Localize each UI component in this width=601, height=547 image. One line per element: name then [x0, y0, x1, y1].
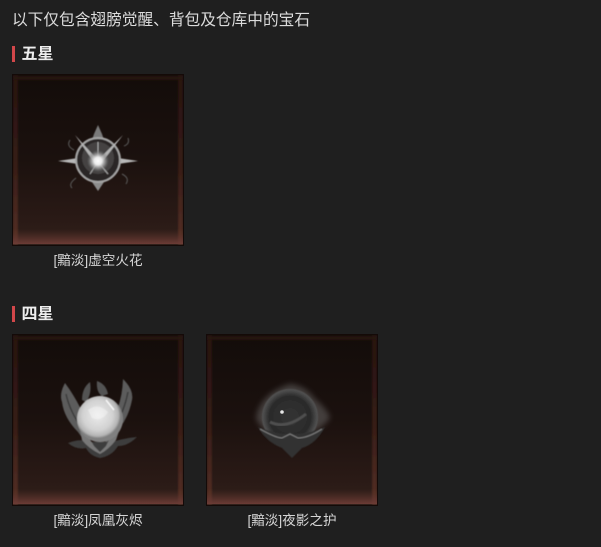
gem card: night shadow guard	[206, 334, 378, 506]
intro text: 以下仅包含翅膀觉醒、背包及仓库中的宝石	[12, 12, 310, 29]
gem label: void spark: [黯淡]虚空火花	[53, 253, 143, 268]
gem label: phoenix ash: [黯淡]凤凰灰烬	[53, 513, 143, 528]
gem card: phoenix ash	[12, 334, 184, 506]
icon: void spark gem	[58, 125, 138, 191]
heading: five star: 五星	[22, 46, 54, 63]
heading: four star: 四星	[22, 306, 54, 323]
icon: night shadow gem	[256, 384, 330, 458]
icon: phoenix ash gem	[61, 379, 137, 458]
gem card: void spark	[12, 74, 184, 246]
gem label: night shadow guard: [黯淡]夜影之护	[247, 513, 337, 528]
